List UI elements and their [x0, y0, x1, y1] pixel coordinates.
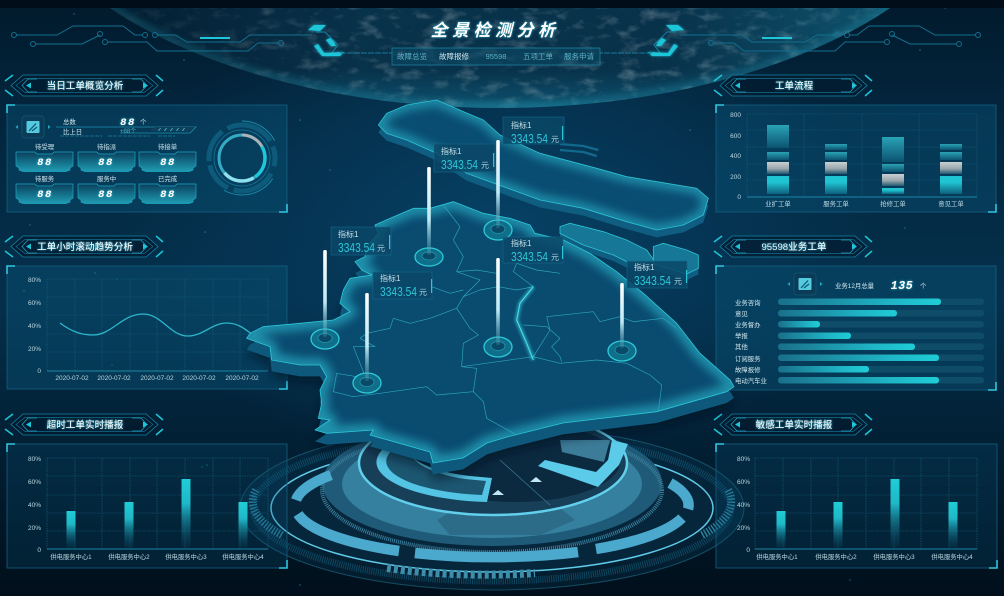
totals row: 比上日 — [63, 127, 82, 136]
stacked bar chart: 400 — [730, 153, 741, 160]
bar chart: 0 — [37, 547, 41, 554]
bar chart — [28, 456, 268, 561]
icon: calendar — [16, 116, 50, 138]
callout: metric F: 3343.54 — [634, 273, 671, 288]
totals row: 个 — [140, 118, 147, 126]
callout: metric E — [503, 237, 563, 264]
panel: sensitive work orders — [714, 414, 997, 568]
panel: 95598 business orders — [714, 236, 996, 390]
callout: metric B: 元 — [481, 161, 489, 170]
section header: daily overview: 当日工单概览分析 — [47, 80, 124, 92]
callout: metric A: 指标1 — [511, 120, 532, 130]
status cards: 88 — [98, 189, 114, 201]
map pin 5 — [484, 258, 512, 357]
navigation tabs: 服务申请 — [564, 51, 594, 61]
status cards: 88 — [37, 157, 53, 169]
title: 全景检测分析 — [430, 21, 560, 40]
callout: metric F: 元 — [674, 277, 682, 286]
status cards: 88 — [160, 189, 176, 201]
callout: metric D: 3343.54 — [380, 284, 417, 299]
bar chart: 60% — [28, 479, 41, 486]
callout: metric D: 指标1 — [380, 273, 401, 283]
horizontal bar chart: 业务咨询 — [735, 298, 761, 307]
line chart: 2020-07-02 — [97, 375, 131, 382]
bar chart: 20% — [737, 525, 750, 532]
panel frame — [7, 105, 287, 212]
district borders — [333, 205, 677, 435]
panel: daily work-order overview — [5, 75, 287, 212]
section header: daily overview — [5, 75, 163, 96]
bar chart: 供电服务中心2 — [108, 552, 150, 561]
callout: metric F: 指标1 — [634, 262, 655, 272]
callout: metric C: 3343.54 — [338, 240, 375, 255]
monthly total: 个 — [920, 282, 927, 290]
status cards — [16, 142, 196, 204]
section header: sensitive: 敏感工单实时播报 — [756, 419, 833, 431]
horizontal bar chart — [735, 298, 984, 385]
status cards: 已完成 — [158, 174, 178, 183]
bar chart: 供电服务中心2 — [815, 552, 857, 561]
bar chart: 40% — [737, 502, 750, 509]
status cards: 待服务 — [35, 174, 55, 183]
stacked bar chart: 600 — [730, 133, 741, 140]
horizontal bar chart: 故障报修 — [735, 365, 761, 374]
line chart: 40% — [28, 323, 41, 330]
line chart: 80% — [28, 277, 41, 284]
status cards: 待受理 — [35, 142, 55, 151]
horizontal bar chart: 意见 — [735, 309, 748, 318]
bar chart: 供电服务中心1 — [756, 552, 798, 561]
bar chart: 80% — [737, 456, 750, 463]
bar chart: 供电服务中心1 — [50, 552, 92, 561]
horizontal bar chart: 业务督办 — [735, 320, 761, 329]
totals row: 总数 — [63, 117, 76, 126]
navigation tabs — [392, 48, 600, 65]
holographic base platform — [240, 411, 744, 590]
callout: metric D — [373, 272, 432, 299]
status cards: 88 — [98, 157, 114, 169]
stacked bar chart: 200 — [730, 174, 741, 181]
status cards: 服务中 — [97, 174, 116, 183]
panel frame — [716, 105, 996, 212]
line chart: 2020-07-02 — [55, 375, 89, 382]
totals row — [56, 117, 196, 136]
island: Changxing — [560, 223, 655, 268]
status cards: 待接单 — [158, 142, 178, 151]
map shadow — [247, 218, 734, 480]
totals row: 88 — [120, 117, 136, 129]
section header: hourly trend: 工单小时滚动趋势分析 — [37, 241, 133, 253]
horizontal bar chart: 电动汽车业 — [735, 376, 768, 385]
line chart — [28, 277, 268, 382]
bar chart: 供电服务中心4 — [222, 552, 264, 561]
callout: metric A: 元 — [551, 135, 559, 144]
panel: work-order process — [714, 75, 996, 212]
stacked bar chart: 业扩工单 — [765, 199, 791, 208]
map pin 2 — [484, 140, 512, 240]
line chart: 0 — [37, 368, 41, 375]
island: Hengsha — [653, 243, 698, 280]
panel: hourly trend — [5, 236, 287, 389]
section header: overtime: 超时工单实时播报 — [47, 419, 124, 431]
map of districts — [247, 100, 734, 480]
map pin 3 — [311, 250, 339, 349]
bar chart: 供电服务中心3 — [873, 552, 915, 561]
navigation tabs: 故障报修 — [439, 51, 469, 61]
callout: metric C: 元 — [377, 244, 385, 253]
navigation tabs: 故障总览 — [397, 51, 427, 61]
section header: 95598 — [714, 236, 872, 257]
callout: metric E: 指标1 — [511, 238, 532, 248]
callout: metric C: 指标1 — [338, 229, 359, 239]
horizontal bar chart: 订阅服务 — [735, 354, 761, 363]
callout: metric C — [331, 227, 391, 255]
panel frame — [7, 444, 287, 568]
callout: metric E: 元 — [551, 253, 559, 262]
monthly total — [835, 280, 927, 293]
section header: overtime — [5, 414, 163, 435]
map pin 6 — [608, 283, 636, 361]
status cards: 待指派 — [97, 142, 117, 151]
panel frame — [716, 444, 997, 568]
bar chart — [737, 456, 977, 561]
panel frame — [7, 266, 287, 389]
status cards: 88 — [37, 189, 53, 201]
callout: metric F — [627, 261, 687, 288]
planet backdrop — [110, 8, 890, 108]
bar chart: 供电服务中心3 — [165, 552, 207, 561]
monthly total: 135 — [891, 280, 913, 293]
icon: calendar — [788, 273, 822, 295]
section header: sensitive — [714, 414, 872, 435]
callout: metric A — [503, 117, 564, 146]
stacked bar chart — [730, 112, 977, 208]
line chart: 2020-07-02 — [140, 375, 174, 382]
mainland — [247, 202, 734, 474]
status cards: 88 — [160, 157, 176, 169]
bar chart: 0 — [746, 547, 750, 554]
line chart: 20% — [28, 346, 41, 353]
circuit decoration: left — [12, 25, 392, 56]
section header: hourly trend — [5, 236, 163, 257]
bar chart: 60% — [737, 479, 750, 486]
stacked bar chart: 0 — [737, 194, 741, 201]
horizontal bar chart: 举报 — [735, 331, 748, 340]
callout: metric B: 指标1 — [441, 146, 462, 156]
bar chart: 80% — [28, 456, 41, 463]
top band — [0, 0, 1004, 8]
bar chart: 20% — [28, 525, 41, 532]
monthly total: 业务12月总量 — [835, 281, 875, 290]
section header: process — [714, 75, 872, 96]
circuit decoration: right — [600, 25, 980, 56]
stacked bar chart: 服务工单 — [823, 199, 849, 208]
panel: overtime work orders — [5, 414, 287, 568]
callout: metric D: 元 — [419, 288, 427, 297]
panel frame — [716, 266, 996, 390]
bar chart: 供电服务中心4 — [931, 552, 973, 561]
callout: metric B — [434, 144, 495, 172]
navigation tabs: 五项工单 — [523, 51, 553, 61]
bar chart: 40% — [28, 502, 41, 509]
map pin 4 — [353, 293, 381, 393]
island: Chongming — [378, 100, 708, 237]
stacked bar chart: 800 — [730, 112, 741, 119]
callout: metric E: 3343.54 — [511, 249, 548, 264]
totals row: +88个 — [120, 128, 136, 135]
horizontal bar chart: 其他 — [735, 342, 748, 351]
river strip — [560, 144, 598, 156]
line chart: 2020-07-02 — [182, 375, 216, 382]
callout: metric B: 3343.54 — [441, 157, 478, 172]
river — [517, 287, 533, 360]
stacked bar chart: 意见工单 — [938, 199, 964, 208]
line chart: 60% — [28, 300, 41, 307]
section header: 95598: 95598业务工单 — [761, 241, 827, 253]
navigation tabs: 95598 — [486, 52, 506, 61]
callout: metric A: 3343.54 — [511, 131, 548, 146]
map pin 1 — [415, 167, 443, 266]
section header: process: 工单流程 — [775, 80, 814, 92]
stacked bar chart: 抢修工单 — [880, 199, 906, 208]
line chart: 2020-07-02 — [225, 375, 259, 382]
ring gauge — [205, 121, 279, 195]
